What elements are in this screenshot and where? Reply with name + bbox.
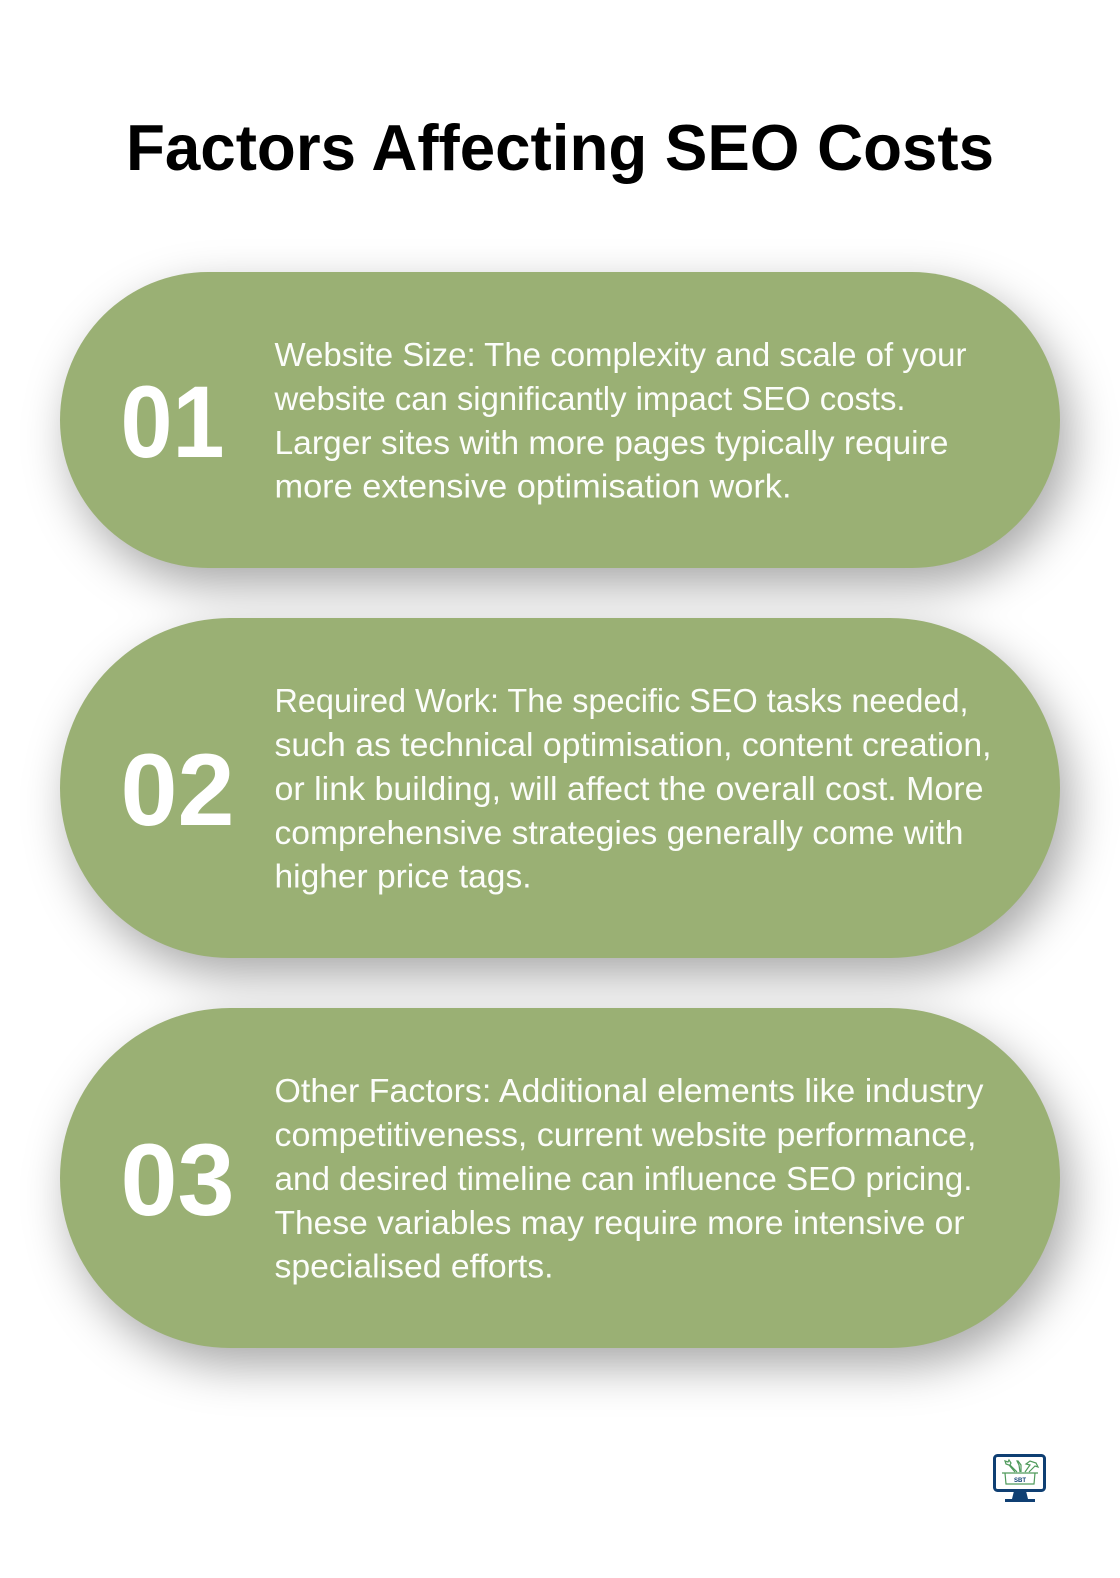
icon: monitor logo with toolbox: SBT (1014, 1478, 1026, 1484)
panel background (60, 272, 1060, 568)
text block: required work: comprehensive strategies generally come with (274, 814, 964, 851)
number 01: 01 (120, 365, 224, 479)
text block: other factors: specialised efforts. (274, 1248, 554, 1284)
number 03: 03 (120, 1123, 234, 1237)
text block: website size: website can significantly impact SEO costs. (274, 380, 906, 417)
text block: required work: or link building, will affect the overall cost. More (274, 770, 984, 807)
text block: required work: Required Work: The specific SEO tasks needed, (274, 682, 968, 719)
title: Factors Affecting SEO Costs (126, 111, 994, 184)
text block: required work (274, 682, 992, 894)
text block: website size: more extensive optimisation work. (274, 468, 792, 504)
text block: other factors: competitiveness, current website performance, (274, 1116, 977, 1153)
number 02: 02 (120, 733, 234, 847)
panel: required work (60, 618, 1060, 958)
text block: other factors: Other Factors: Additional elements like industry (274, 1072, 984, 1109)
text block: other factors (274, 1072, 984, 1284)
text block: other factors: and desired timeline can influence SEO pricing. (274, 1160, 972, 1197)
text block: required work: higher price tags. (274, 858, 532, 894)
text block: website size: Website Size: The complexity and scale of your (274, 336, 966, 373)
icon: monitor logo with toolbox (994, 1456, 1044, 1502)
text block: required work: such as technical optimisation, content creation, (274, 726, 992, 763)
text block: website size (274, 336, 966, 504)
panel background (60, 618, 1060, 958)
text block: website size: Larger sites with more pages typically require (274, 424, 948, 461)
panel: website size (60, 272, 1060, 568)
panel: other factors (60, 1008, 1060, 1348)
text block: other factors: These variables may require more intensive or (274, 1204, 964, 1241)
panel background (60, 1008, 1060, 1348)
